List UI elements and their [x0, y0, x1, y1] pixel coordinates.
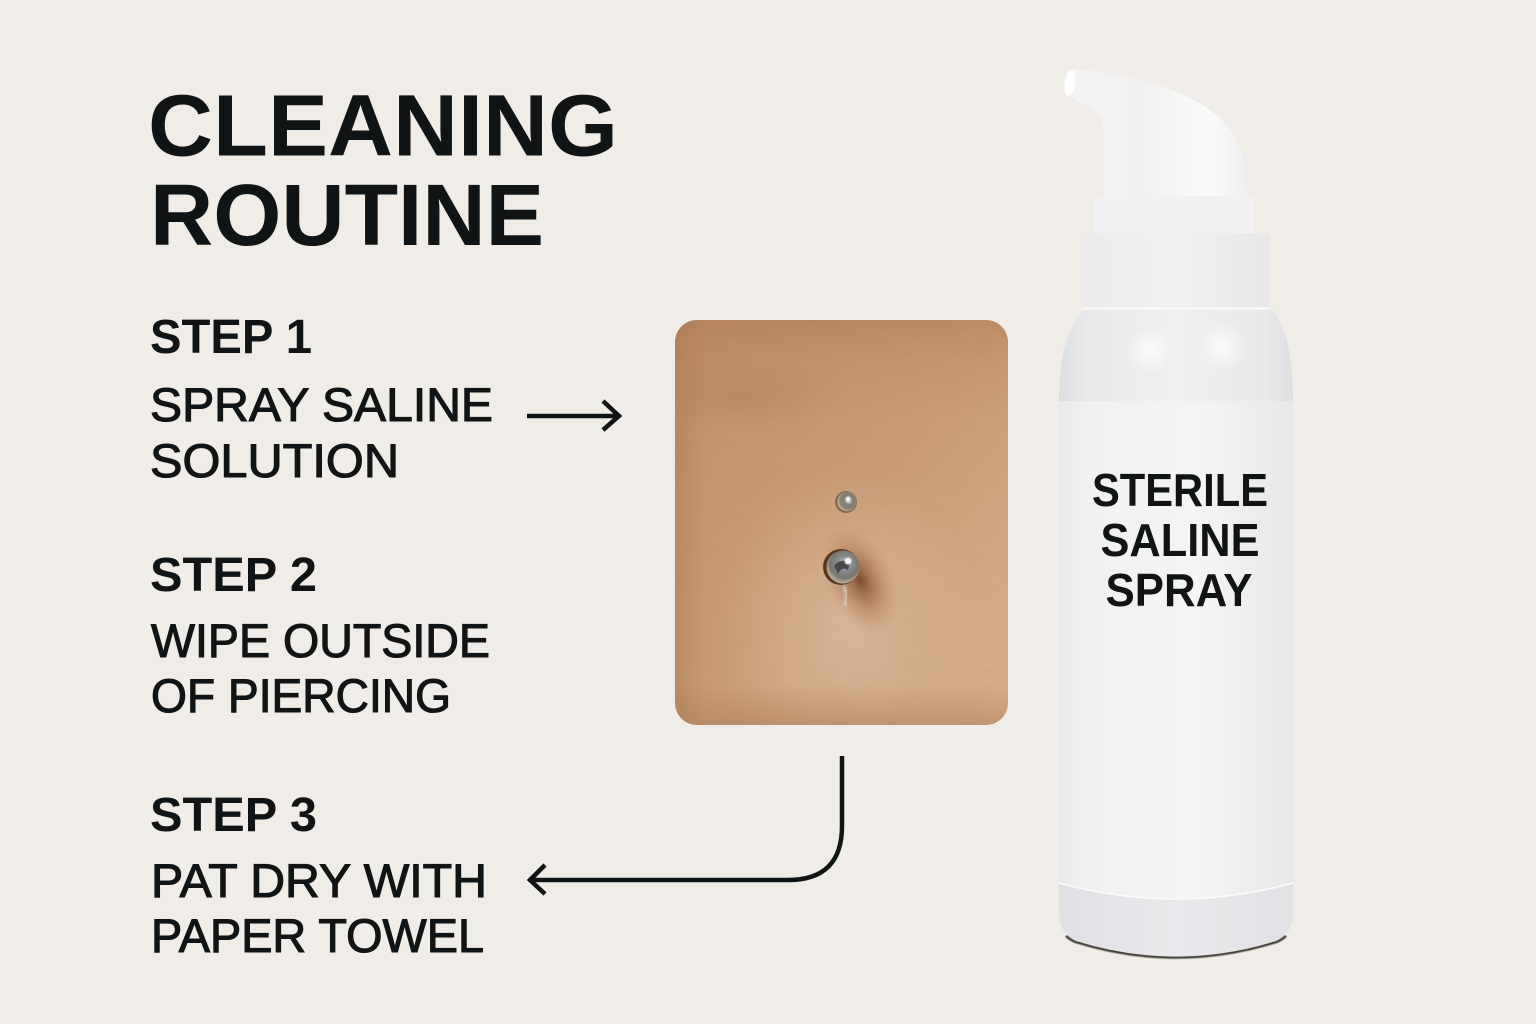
shoulder highlights — [1126, 321, 1248, 374]
bottle ground shadow — [1066, 936, 1286, 958]
bottle label text — [1092, 464, 1268, 616]
step 1 — [150, 311, 493, 487]
upper jewel ball — [835, 491, 857, 513]
bottle shoulder — [1059, 310, 1293, 402]
step 1 description — [150, 378, 493, 487]
cap seam — [1082, 308, 1270, 310]
step 3 description: PAPER TOWEL — [151, 909, 484, 962]
bottle base — [1059, 883, 1293, 956]
step 2 — [150, 549, 490, 722]
skin fold shading — [739, 392, 752, 398]
title — [148, 78, 618, 264]
base seam — [1059, 883, 1293, 899]
lower jewel ball — [823, 549, 860, 606]
bottle: sterile saline spray — [1059, 69, 1293, 958]
step 1 description: SPRAY SALINE — [150, 378, 493, 431]
title: ROUTINE — [150, 167, 544, 264]
step 2 description — [151, 614, 490, 722]
bottle label text: SALINE — [1100, 514, 1260, 566]
step 3 description — [151, 854, 487, 962]
title: CLEANING — [148, 78, 618, 174]
nozzle opening — [1063, 69, 1077, 97]
skin texture — [675, 320, 1008, 725]
bottle label text: SPRAY — [1106, 564, 1252, 616]
step 2 description: OF PIERCING — [151, 669, 451, 722]
step 1 heading: STEP 1 — [150, 311, 312, 364]
step 3 description: PAT DRY WITH — [151, 854, 487, 907]
pump collar — [1094, 196, 1254, 235]
photo: pierced navel — [645, 320, 1008, 725]
step 2 description: WIPE OUTSIDE — [151, 614, 490, 667]
step 1 description: SOLUTION — [150, 434, 399, 487]
navel hollow — [830, 536, 892, 626]
cap — [1082, 233, 1270, 308]
bottle label text: STERILE — [1092, 464, 1268, 516]
pump nozzle — [1064, 69, 1246, 197]
step 3 heading: STEP 3 — [150, 789, 317, 842]
arrow: step 1 to navel photo — [527, 401, 619, 430]
step 3 — [150, 789, 487, 962]
arrow: navel photo to step 3 — [530, 756, 842, 894]
step 2 heading: STEP 2 — [150, 549, 317, 602]
bottle label area — [1059, 401, 1293, 906]
